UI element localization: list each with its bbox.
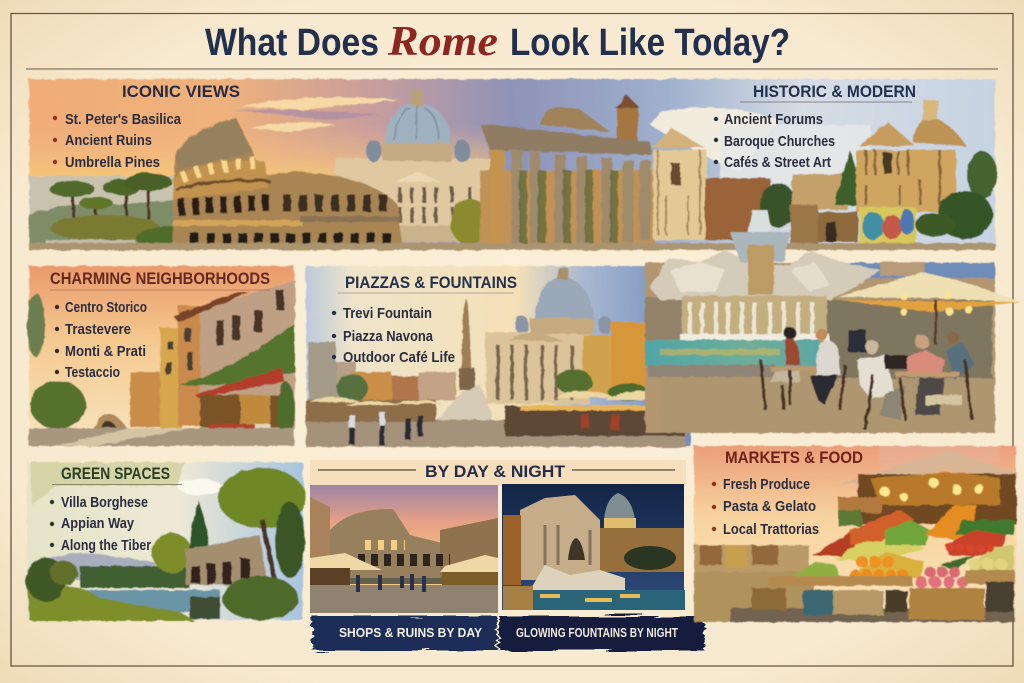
list: markets and food: Local Trattorias [723, 521, 819, 538]
heading: green spaces: GREEN SPACES [61, 464, 170, 483]
green trees right [915, 151, 997, 239]
title: Rome [387, 19, 498, 65]
list: piazzas: Piazza Navona [343, 328, 434, 345]
list: historic and modern: Cafés & Street Art [724, 154, 831, 171]
ribbon: night [499, 616, 704, 650]
list: green spaces: Along the Tiber [61, 537, 151, 554]
night scene [502, 484, 685, 610]
title: What Does [205, 22, 379, 64]
list: neighborhoods [50, 290, 270, 381]
title: Look Like Today? [510, 22, 790, 64]
list: green spaces [50, 484, 182, 554]
list: neighborhoods: Monti & Prati [65, 343, 146, 360]
baroque church [652, 128, 796, 240]
title rule [26, 68, 998, 70]
market artwork [694, 446, 1018, 622]
list: neighborhoods: Centro Storico [65, 299, 147, 316]
graffiti wall [859, 207, 916, 245]
Colosseum [173, 118, 402, 250]
list: piazzas: Trevi Fountain [343, 305, 432, 322]
list: green spaces: Villa Borghese [61, 494, 148, 511]
ribbon: night: GLOWING FOUNTAINS BY NIGHT [516, 626, 678, 640]
day scene [310, 485, 498, 613]
fountain and cafe artwork [645, 210, 1020, 433]
ribbon: day: SHOPS & RUINS BY DAY [339, 625, 482, 640]
landscape artwork [26, 462, 306, 621]
St Peter's Basilica [335, 90, 495, 245]
cafe diners [761, 327, 975, 430]
list: iconic views: St. Peter's Basilica [65, 111, 182, 128]
list: piazzas [332, 293, 514, 366]
list: iconic views [53, 111, 182, 171]
list: historic and modern: Ancient Forums [724, 111, 823, 128]
neighborhood artwork [27, 266, 295, 447]
heading: charming neighborhoods: CHARMING NEIGHBORHOODS [50, 269, 270, 288]
list: markets and food [712, 476, 819, 538]
distant building and cypress [790, 150, 866, 245]
produce mounds [790, 505, 1014, 582]
Roman Forum temple [480, 95, 655, 248]
panel: markets and food [694, 446, 1018, 622]
heading: iconic views: ICONIC VIEWS [122, 82, 240, 101]
list: historic and modern: Baroque Churches [724, 133, 835, 150]
title [205, 19, 790, 65]
list: markets and food: Pasta & Gelato [723, 498, 816, 515]
list: markets and food: Fresh Produce [723, 476, 810, 493]
panel: piazzas and fountains [306, 210, 1020, 447]
ribbon: day [312, 616, 497, 650]
list: iconic views: Ancient Ruins [65, 132, 152, 149]
list: iconic views: Umbrella Pines [65, 154, 160, 171]
list: historic and modern [714, 102, 912, 171]
heading: by day and night: BY DAY & NIGHT [425, 462, 566, 481]
piazza artwork [306, 266, 691, 447]
list: neighborhoods: Testaccio [65, 364, 120, 381]
panel: charming neighborhoods [27, 266, 295, 447]
list: green spaces: Appian Way [61, 515, 135, 532]
panel: green spaces [26, 462, 306, 621]
header band [310, 460, 686, 486]
heading: markets and food: MARKETS & FOOD [725, 448, 863, 467]
list: neighborhoods: Trastevere [65, 321, 131, 338]
panel: iconic views and historic and modern [29, 79, 997, 250]
panorama artwork [29, 79, 997, 250]
modern church with dome [856, 100, 967, 212]
umbrella pines [45, 173, 204, 250]
heading: historic and modern: HISTORIC & MODERN [753, 82, 916, 101]
panel: by day and night [310, 460, 704, 650]
list: piazzas: Outdoor Café Life [343, 349, 455, 366]
heading: piazzas and fountains: PIAZZAS & FOUNTAINS [345, 273, 517, 292]
